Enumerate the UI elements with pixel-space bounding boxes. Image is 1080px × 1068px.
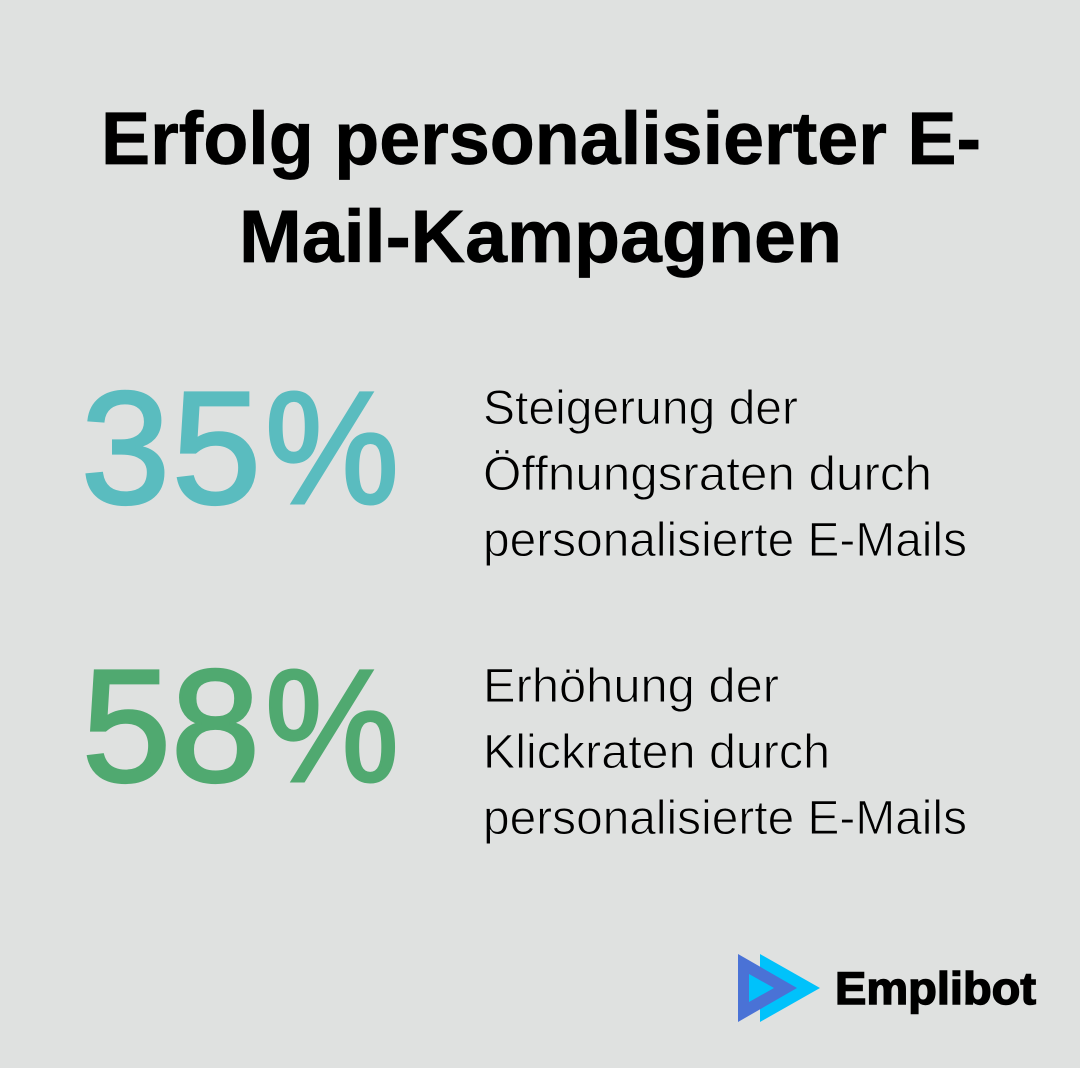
stat: 58% bbox=[82, 636, 399, 815]
stat: 58%: 8 bbox=[171, 636, 260, 815]
description: Klickraten: personalisierte E-Mails bbox=[483, 792, 967, 845]
stat: 58%: % bbox=[265, 636, 399, 815]
title bbox=[101, 97, 981, 278]
stat: 35%: % bbox=[265, 358, 399, 537]
icon: play triangles bbox=[738, 954, 820, 1022]
description: Öffnungsraten: Öffnungsraten durch bbox=[483, 448, 932, 501]
stat: 58%: 5 bbox=[82, 636, 171, 815]
description: Klickraten bbox=[483, 660, 967, 845]
title: Erfolg personalisierter E- bbox=[101, 97, 981, 180]
description: Öffnungsraten bbox=[483, 382, 967, 567]
stat: 35% bbox=[81, 358, 399, 537]
description: Klickraten: Erhöhung der bbox=[483, 660, 779, 713]
logo wordmark: Emplibot bbox=[835, 963, 1036, 1014]
stat: 35%: 5 bbox=[172, 358, 261, 537]
logo: Emplibot bbox=[738, 954, 1036, 1022]
description: Öffnungsraten: Steigerung der bbox=[483, 382, 798, 435]
title: Mail-Kampagnen bbox=[239, 195, 842, 278]
stat: 35%: 3 bbox=[81, 358, 170, 537]
description: Klickraten: Klickraten durch bbox=[483, 726, 830, 779]
description: Öffnungsraten: personalisierte E-Mails bbox=[483, 514, 967, 567]
